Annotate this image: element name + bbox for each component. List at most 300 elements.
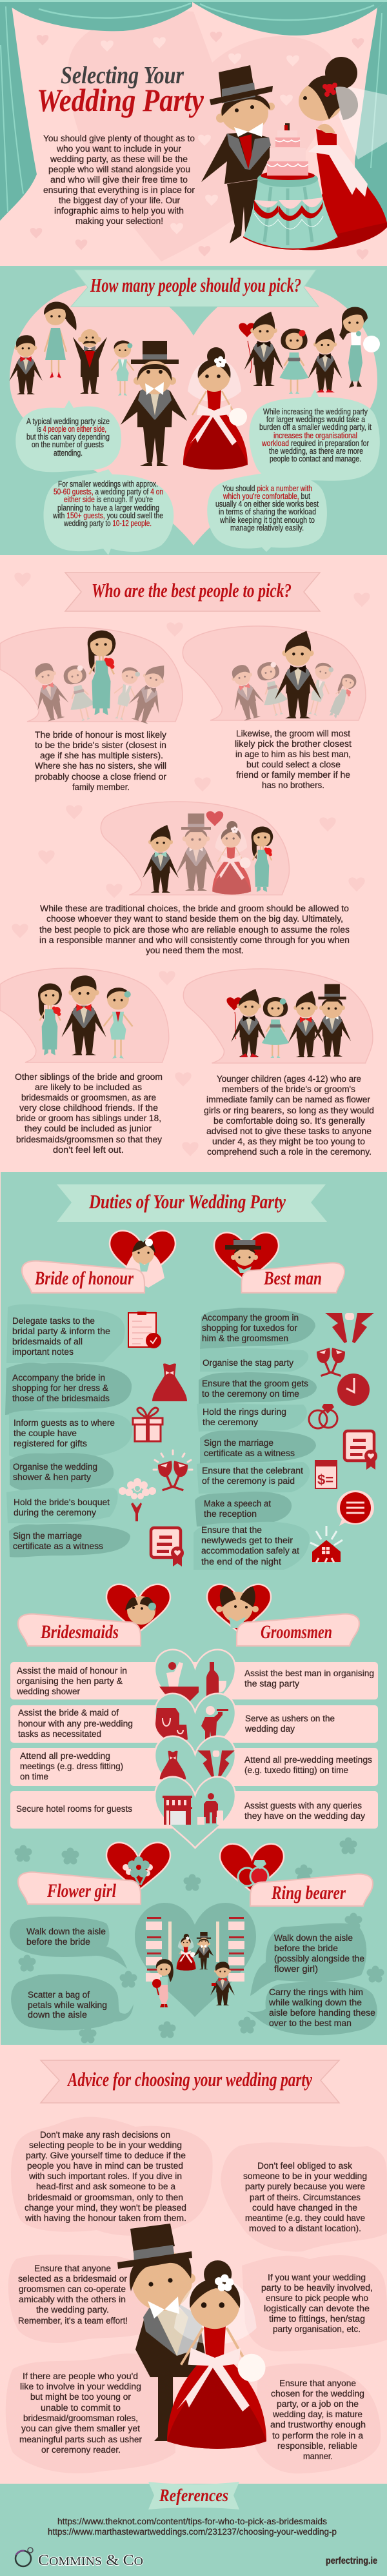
card: best man	[214, 1233, 344, 1293]
duty: ceremony on time: Ensure that the groom gets	[202, 1379, 308, 1388]
duty: accompany the bride: those of the bridesmaids	[12, 1394, 110, 1403]
advice blob: mature and trustworthy	[255, 2364, 381, 2473]
panel: duties	[5, 1184, 384, 2044]
row 2 text: tasks as necessitated	[18, 1729, 101, 1739]
panel: advice	[6, 2060, 387, 2473]
bubble: scatter petals: Scatter a bag of	[28, 1990, 90, 2000]
reference links: https://www.marthastewartweddings.com/231237/choosing-your-wedding-p	[48, 2527, 337, 2537]
bubble: smaller weddings: with 150+ guests, you could swell the	[52, 511, 163, 520]
advice blob: too young: but might be too young or	[30, 2392, 132, 2402]
card: ring bearer	[220, 1844, 373, 1906]
garland	[254, 200, 323, 221]
card: flower girl	[18, 1843, 170, 1904]
bubble: carry the rings: over to the best man	[269, 2018, 352, 2028]
advice blob: don't feel obliged: someone to be in your wedding	[243, 2171, 367, 2181]
girl in teal dress	[44, 302, 77, 378]
bubble: carry the rings: while walking down the	[268, 1998, 362, 2007]
text: siblings: are likely to be included as	[35, 1082, 142, 1092]
row 1 text: wedding shower	[16, 1687, 81, 1696]
advice blob: heavily involved	[242, 2255, 387, 2351]
advice blob: co-operate: Remember, it's a team effort!	[18, 2316, 128, 2326]
bubble: scatter petals: down the aisle	[28, 2010, 87, 2020]
bride	[183, 347, 248, 470]
bubble: ring bearer walk: Walk down the aisle	[274, 1933, 353, 1943]
row 2 text: Assist the bride & maid of	[18, 1708, 119, 1718]
bubble: ring bearer walk: (possibly alongside the	[274, 1954, 364, 1963]
intro text: making your selection!	[75, 216, 163, 226]
text: younger children: under 4, as they might be too young to	[212, 1137, 365, 1146]
bubble: walk down aisle: Walk down the aisle	[26, 1927, 106, 1936]
advice blob: don't feel obliged: part of theirs. Circumstances	[250, 2193, 361, 2202]
bubble: pick a comfortable number	[207, 472, 327, 552]
card: bridesmaids	[18, 1585, 170, 1646]
icon: rings	[309, 1404, 337, 1428]
text: younger children: advised not to give these tasks to anyone	[206, 1126, 372, 1136]
advice blob: don't feel obliged: could have changed in the	[252, 2203, 357, 2213]
advice blob: co-operate: the wedding party.	[36, 2305, 109, 2315]
duty: celebrant paid: Ensure that the celebrant	[202, 1466, 303, 1476]
text: best man: but could select a close	[246, 760, 341, 769]
text: best man: Likewise, the groom will most	[236, 729, 350, 738]
text: bride of honour: family member.	[72, 782, 130, 792]
advice blob: heavily involved: party to be heavily involved,	[261, 2283, 373, 2293]
text: siblings	[15, 1072, 163, 1155]
text: traditional choices	[39, 904, 350, 955]
advice blob: rash decisions: people you have in mind can be trusted	[27, 2161, 183, 2171]
text: younger children: members of the bride's or groom's	[222, 1084, 355, 1094]
panel: best man choice	[183, 626, 366, 722]
advice blob: too young: If there are people who you'd	[23, 2371, 138, 2381]
advice blob: co-operate: Ensure that anyone	[34, 2264, 111, 2273]
aisle heart illustration	[135, 1903, 256, 2017]
advice blob: mature and trustworthy: responsible, reliable	[277, 2441, 357, 2451]
duty: organise shower: shower & hen party	[13, 1472, 91, 1482]
heading ribbon	[41, 2060, 339, 2103]
bubble: pick a comfortable number: manage relatively easily.	[230, 523, 304, 532]
heading ribbon: Duties of Your Wedding Party	[88, 1190, 286, 1213]
bubble: typical size: but this can vary depending	[26, 432, 110, 441]
panel: bride of honour choice	[0, 627, 183, 726]
logo: Commins and Co	[15, 2548, 143, 2568]
duty: organise stag	[200, 1348, 308, 1372]
text: best man: likely pick the brother closest	[235, 739, 352, 749]
duty: organise shower: Organise the wedding	[13, 1462, 97, 1472]
icon: invoice: $=	[317, 1472, 333, 1488]
heading ribbon	[57, 1184, 327, 1222]
bubble: typical size: is 4 people on either side,	[37, 424, 106, 434]
text: siblings: Other siblings of the bride and groom	[15, 1072, 163, 1082]
duty: organise shower	[10, 1453, 114, 1492]
text: traditional choices: in a responsible manner and who will consistently come through for you when	[39, 935, 350, 945]
duty: delegate tasks: bridal party & inform the	[12, 1326, 110, 1336]
advice blob: too young: meaningful parts such as usher	[19, 2435, 143, 2444]
text: traditional choices: you need them the most.	[146, 946, 244, 955]
bubble: organisational workload	[249, 389, 380, 482]
card: bride of honour: Bride of honour	[34, 1268, 134, 1289]
row 2 text	[18, 1708, 335, 1739]
intro text: wedding party, as these will be the	[50, 154, 188, 164]
duty: sign certificate: Sign the marriage	[13, 1531, 82, 1541]
icon: certificate	[344, 1431, 377, 1470]
bubble: typical size: on the number of guests	[32, 440, 104, 449]
heart: shopping and usher icons	[155, 1694, 235, 1765]
duty: sign certificate	[200, 1430, 316, 1464]
advice blob: mature and trustworthy: and trustworthy enough	[270, 2420, 366, 2429]
intro text: people who will stand alongside you	[48, 165, 190, 174]
advice blob: don't feel obliged: moved to a distant location).	[249, 2224, 361, 2233]
intro text: and who will give their free time to	[50, 175, 188, 185]
large heart	[10, 283, 377, 545]
text: siblings: bridesmaids/groomsmen so that they	[16, 1135, 162, 1144]
duty: sign certificate	[9, 1524, 130, 1557]
advice blob: rash decisions: change your mind, they won't be pleased	[25, 2203, 186, 2213]
advice blob: too young: you can give them smaller yet	[21, 2424, 140, 2433]
advice blob: don't feel obliged: Don't feel obliged to ask	[257, 2161, 352, 2171]
text: best man	[235, 729, 352, 790]
red shoes	[316, 389, 335, 392]
advice blob: mature and trustworthy: party, or a job on the	[277, 2399, 359, 2409]
duty: organise stag: Organise the stag party	[203, 1358, 293, 1368]
heart balloon	[226, 997, 242, 1039]
duty: inform guests: registered for gifts	[14, 1439, 87, 1448]
panel: group choice	[101, 802, 289, 895]
text: younger children	[204, 1074, 374, 1157]
card: groomsmen: Groomsmen	[261, 1621, 332, 1643]
bubble: smaller weddings: 50-60 guests, a wedding party of 4 on	[54, 487, 163, 496]
text: best man: has no brothers.	[262, 780, 324, 790]
ring bearer figure	[210, 1962, 235, 2005]
duty: hold rings: Hold the rings during	[203, 1407, 286, 1417]
heart	[206, 811, 223, 826]
duty: hold bouquet	[6, 1488, 118, 1523]
illustration: bride	[293, 57, 387, 250]
duty: delegate tasks: Delegate tasks to the	[12, 1316, 95, 1326]
row 4 text: they have on the wedding day	[244, 1811, 365, 1821]
background large heart	[68, 11, 334, 261]
advice blob: don't feel obliged	[221, 2142, 387, 2252]
icon: glasses	[317, 1348, 345, 1377]
illustration: table with cake	[243, 123, 338, 249]
bubble: walk down aisle	[10, 1916, 127, 1969]
groom	[121, 341, 187, 466]
duty: accompany the bride	[5, 1363, 132, 1415]
advice blob: mature and trustworthy: to perform the role in a	[272, 2431, 363, 2440]
row 1 text: Assist the best man in organising	[244, 1668, 374, 1678]
card: ring bearer: Ring bearer	[271, 1882, 346, 1903]
reference links	[48, 2517, 337, 2537]
panel: younger children	[183, 969, 373, 1063]
bubble: pick a comfortable number: usually 4 on either side works best	[215, 499, 319, 509]
bubble: carry the rings: aisle before handing these	[269, 2008, 375, 2018]
bubble: organisational workload: for larger weddings would take a	[266, 414, 366, 424]
heart: party icons	[155, 1650, 235, 1721]
bubble: smaller weddings	[43, 469, 174, 555]
advice blob: rash decisions: head-first and ask someone to be a	[36, 2182, 175, 2191]
bubble: organisational workload: the wedding, as there are more	[269, 446, 363, 456]
row 4 text: Assist guests with any queries	[244, 1801, 362, 1810]
advice blob: mature and trustworthy: chosen for the wedding	[271, 2389, 364, 2399]
advice blob: co-operate: amicably with the others in	[19, 2295, 126, 2304]
icon: certificate	[151, 1528, 184, 1567]
row backgrounds	[10, 1662, 378, 1829]
duty: accompany the bride: Accompany the bride in	[12, 1373, 105, 1383]
text: siblings: very close childhood friends. If the	[19, 1103, 158, 1113]
icon: speech bubble	[337, 1490, 374, 1526]
duty: ceremony on time: to the ceremony on time	[202, 1389, 299, 1399]
icon: gift	[133, 1408, 163, 1441]
bubble: pick a comfortable number: while keeping it tight enough to	[219, 515, 315, 525]
duty: accompany the bride: shopping for her dress &	[12, 1383, 108, 1393]
wedding guests right	[239, 307, 380, 394]
duty: hold rings: the ceremony	[203, 1417, 258, 1427]
text: younger children: Younger children (ages 4-12) who are	[217, 1074, 361, 1084]
icon: clock	[337, 1374, 370, 1406]
icon: bouquet	[119, 1478, 156, 1521]
text: younger children: be comfortable doing so. It's generally	[213, 1116, 365, 1126]
heading ribbon	[71, 270, 319, 307]
heart: hotel and guest icons	[155, 1777, 235, 1848]
text: younger children: comprehend such a role in the ceremony.	[207, 1147, 372, 1157]
card: groomsmen	[207, 1585, 359, 1646]
bubble: typical size: attending.	[54, 448, 83, 458]
advice blob: heavily involved: party organisation, etc.	[273, 2324, 361, 2334]
advice blob: co-operate: selected as a bridesmaid or	[18, 2274, 128, 2284]
advice blob: too young: unable to commit to	[41, 2403, 121, 2413]
bubble: organisational workload: workload required in preparation for	[261, 438, 370, 448]
duty: newlyweds accommodation: accommodation safely at	[201, 1546, 299, 1556]
panel: how many people	[9, 270, 380, 555]
duty: delegate tasks	[6, 1304, 125, 1363]
card: bride of honour	[22, 1231, 175, 1293]
bubble: pick a comfortable number: which you're comfortable, but	[223, 491, 310, 501]
advice blob: rash decisions: bridesmaid or groomsman, only to then	[28, 2193, 183, 2202]
duty: inform guests	[9, 1410, 132, 1459]
bubble: walk down aisle: before the bride	[26, 1937, 90, 1947]
duty: make speech: the reception	[204, 1509, 257, 1519]
bubble: organisational workload: people to contact and manage.	[270, 454, 361, 463]
heading ribbon: Who are the best people to pick?	[92, 579, 292, 602]
bubble: pick a comfortable number: in terms of sharing the workload	[219, 507, 316, 516]
text: siblings: don't feel left out.	[53, 1145, 124, 1155]
heart balloon	[239, 323, 255, 373]
heading ribbon	[148, 2482, 239, 2510]
duty: sign certificate: Sign the marriage	[204, 1438, 273, 1448]
intro text	[43, 134, 195, 226]
advice blob: don't feel obliged: party purely because you were	[245, 2182, 365, 2191]
icon: dress	[152, 1363, 187, 1401]
reference links: https://www.theknot.com/content/tips-for-who-to-pick-as-bridesmaids	[57, 2517, 327, 2526]
text: siblings: bridesmaids or groomsmen, as are	[21, 1093, 156, 1102]
duty: accompany the groom	[200, 1308, 315, 1350]
text: bride of honour: The bride of honour is most likely	[35, 730, 166, 740]
duty: hold rings	[197, 1403, 307, 1432]
bubble: ring bearer walk: before the bride	[274, 1943, 338, 1953]
advice blob: too young: like to involve in your wedding	[20, 2382, 141, 2391]
row 2 text: honour with any pre-wedding	[18, 1719, 133, 1729]
text: bride of honour: to be the bride's sister (closest in	[35, 740, 166, 750]
duties list: best man	[194, 1308, 377, 1570]
panel: who are the best people	[0, 573, 374, 1157]
flower girl figure	[152, 1959, 174, 2007]
bubble: pick a comfortable number: You should pick a number with	[223, 483, 312, 493]
bubble: ring bearer walk	[250, 1923, 366, 1996]
advice blob: co-operate	[8, 2255, 155, 2343]
table: bridesmaid and groomsmen duties	[10, 1650, 378, 1848]
title: Wedding Party	[37, 82, 204, 118]
text: bride of honour: probably choose a close friend or	[35, 772, 167, 782]
text: younger children: girls or ring bearers, so long as they would	[204, 1106, 374, 1115]
duty: celebrant paid: of the ceremony is paid	[202, 1476, 295, 1486]
advice blob: rash decisions: with such important roles. If you dive in	[28, 2171, 182, 2181]
advice blob: rash decisions: Don't make any rash decisions on	[40, 2130, 170, 2140]
advice blob: rash decisions: with having the honour taken from them.	[25, 2213, 186, 2223]
intro text: the biggest day of your life. Our	[59, 196, 180, 205]
bubble: smaller weddings: planning to have a larger wedding	[57, 503, 159, 512]
icon: tuxedo	[325, 1313, 374, 1343]
row 1 text: organising the hen party &	[17, 1676, 123, 1686]
text: bride of honour	[35, 730, 167, 792]
advice blob: rash decisions: selecting people to be in your wedding	[29, 2140, 182, 2150]
advice blob: rash decisions: party. Give yourself time to deduce if the	[26, 2151, 186, 2160]
duty: celebrant paid	[197, 1462, 310, 1494]
card: best man: Best man	[263, 1268, 322, 1289]
icon: house	[310, 1526, 342, 1563]
advice blob: mature and trustworthy: Ensure that anyone	[279, 2378, 356, 2388]
duty: ceremony on time	[199, 1372, 317, 1405]
bubble: scatter petals	[11, 1974, 134, 2031]
bubble: scatter petals: petals while walking	[28, 2000, 107, 2010]
bubble: typical size	[15, 400, 121, 472]
illustration: groom	[117, 2224, 206, 2441]
intro text: infographic aims to help you with	[54, 206, 184, 216]
panel: header	[0, 0, 387, 261]
icon: invoice	[315, 1461, 337, 1488]
bubble: smaller weddings: wedding party to 10-12 people.	[63, 518, 152, 528]
text: traditional choices: While these are traditional choices, the bride and groom should be allowed to	[40, 904, 349, 913]
curtains	[0, 0, 387, 223]
row 4 text: Secure hotel rooms for guests	[16, 1804, 132, 1814]
bald man	[73, 329, 107, 394]
icon: champagne toast	[154, 1450, 192, 1491]
duties list: bride of honour	[5, 1304, 192, 1567]
wedding guests left	[9, 302, 134, 396]
text: bride of honour: age if she has multiple sisters).	[40, 751, 163, 760]
row 3 text: meetings (e.g. dress fitting)	[20, 1761, 123, 1771]
heading ribbon: Advice for choosing your wedding party	[67, 2068, 312, 2091]
duty: delegate tasks: bridesmaids of all	[12, 1337, 83, 1346]
logo: Commins and Co: COMMINS & C O	[38, 2552, 143, 2568]
advice blob: mature and trustworthy: wedding day, is mature	[272, 2409, 362, 2419]
row 1 text	[16, 1666, 374, 1696]
title	[37, 62, 204, 118]
row 2 text: Serve as ushers on the	[245, 1714, 335, 1723]
row 1 text: the stag party	[244, 1679, 299, 1689]
text: traditional choices: the best people to pick are those who are reliable enough to assume the roles	[39, 925, 350, 935]
duty: hold bouquet: Hold the bride's bouquet	[14, 1497, 110, 1507]
duty: inform guests: Inform guests as to where	[14, 1418, 115, 1428]
row 3 text: on time	[20, 1772, 48, 1781]
bubble: smaller weddings: For smaller weddings with approx.	[58, 479, 158, 489]
row 3 text: Attend all pre-wedding	[20, 1751, 110, 1761]
duty: hold bouquet: during the ceremony	[14, 1508, 96, 1517]
bubble: ring bearer walk: flower girl)	[274, 1964, 318, 1974]
illustration: bride veil	[339, 86, 387, 159]
duty: inform guests: the couple have	[14, 1428, 77, 1438]
text: siblings: bride or groom has siblings under 18,	[16, 1113, 161, 1123]
bubble: organisational workload: increases the organisational	[273, 431, 357, 440]
panel: references	[15, 2482, 377, 2568]
duty: newlyweds accommodation: the end of the night	[201, 1557, 281, 1567]
duty: newlyweds accommodation	[194, 1522, 310, 1570]
duty: sign certificate: certificate as a witness	[204, 1448, 295, 1458]
text: younger children: immediate family can be named as flower	[206, 1095, 371, 1104]
illustration: groom	[201, 65, 275, 243]
bubble: typical size: A typical wedding party size	[26, 416, 110, 426]
bubble: carry the rings	[246, 1982, 377, 2035]
heading ribbon: How many people should you pick?	[90, 274, 301, 296]
title: Selecting Your	[61, 62, 184, 89]
card: bridesmaids: Bridesmaids	[40, 1621, 119, 1643]
bubble: smaller weddings: either side is enough. If you're	[64, 494, 153, 504]
row 1 text: Assist the maid of honour in	[17, 1666, 127, 1676]
row 3 text	[20, 1751, 372, 1781]
duty: sign certificate: certificate as a witness	[13, 1541, 103, 1551]
duty: accompany the groom: him & the groomsmen	[202, 1334, 288, 1343]
advice blob: mature and trustworthy: manner.	[303, 2451, 333, 2461]
heading ribbon: References	[159, 2486, 228, 2505]
advice blob: co-operate: groomsmen can co-operate	[19, 2284, 126, 2294]
advice blob: rash decisions	[11, 2117, 213, 2236]
intro text: who you want to include in your	[56, 144, 182, 154]
duty: newlyweds accommodation: newlyweds get to their	[201, 1536, 293, 1545]
illustration: bride	[167, 2260, 266, 2449]
duty: make speech	[195, 1492, 292, 1526]
advice blob: too young	[6, 2353, 175, 2473]
intro text: You should give plenty of thought as to	[43, 134, 195, 143]
row 4 text	[16, 1801, 365, 1821]
advice blob: too young: or ceremony reader.	[41, 2445, 121, 2455]
advice blob: heavily involved: If you want your wedding	[268, 2273, 366, 2282]
website: perfectring.ie	[326, 2555, 377, 2566]
row 3 text: Attend all pre-wedding meetings	[244, 1755, 372, 1765]
bubble: carry the rings: Carry the rings with him	[269, 1987, 363, 1997]
advice blob: heavily involved: ensure to pick people who	[266, 2293, 368, 2303]
row 3 text: (e.g. tuxedo fitting) on time	[244, 1765, 348, 1775]
panel: flower girl and ring bearer	[10, 1837, 384, 2044]
heart: dress and tuxedo icons	[155, 1736, 235, 1807]
panel: siblings	[0, 968, 169, 1062]
text: siblings: they could be included as junior	[25, 1124, 152, 1133]
advice blob: too young: bridesmaid/groomsman roles,	[23, 2413, 138, 2423]
advice blob: heavily involved: logistically can devote the	[264, 2304, 370, 2313]
text: bride of honour: Where she has no sisters, she will	[35, 761, 166, 771]
text: best man: friend or family member if he	[236, 770, 350, 780]
advice blob: heavily involved: time to fittings, hen/stag	[269, 2314, 365, 2324]
duty: make speech: Make a speech at	[204, 1499, 271, 1508]
icon: clipboard	[128, 1312, 161, 1348]
duty: accompany the groom: Accompany the groom in	[202, 1313, 299, 1323]
text: best man: in age to him as his best man,	[235, 749, 351, 759]
row 2 text: wedding day	[244, 1724, 295, 1734]
duty: accompany the groom: shopping for tuxedos for	[202, 1323, 298, 1333]
text: traditional choices: choose whoever they want to stand beside them on the big day. Ultimately,	[46, 914, 343, 924]
advice blob: don't feel obliged: meantime (e.g. they could have	[245, 2213, 365, 2223]
card: flower girl: Flower girl	[46, 1880, 117, 1902]
duty: newlyweds accommodation: Ensure that the	[201, 1525, 262, 1535]
duty: delegate tasks: important notes	[12, 1347, 74, 1357]
heading ribbon	[65, 573, 320, 611]
intro text: ensuring that everything is in place for	[43, 185, 195, 195]
